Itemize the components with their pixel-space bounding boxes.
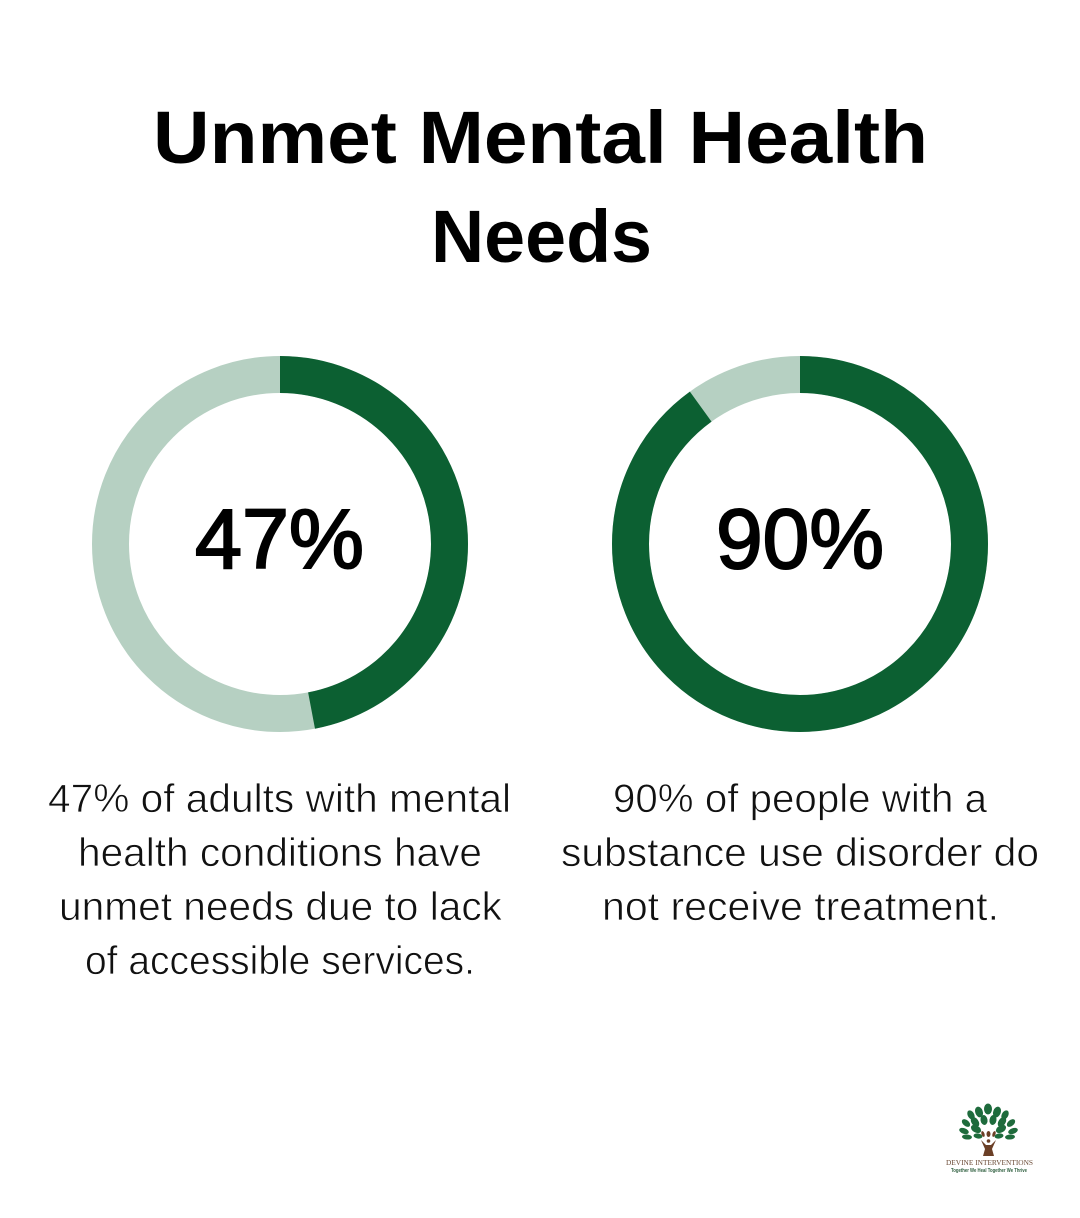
description: 90% of people: substance use disorder do xyxy=(561,831,1039,875)
description: 47% of adults: 47% of adults with mental xyxy=(48,777,511,821)
logo name: DEVINE INTERVENTIONS xyxy=(946,1159,1033,1167)
donut chart: 90% xyxy=(630,374,970,714)
icon: figure trunk xyxy=(981,1131,996,1156)
logo: Devine Interventions xyxy=(946,1104,1033,1174)
description: 47% of adults: health conditions have xyxy=(78,831,482,875)
title: Unmet Mental Health xyxy=(153,96,928,179)
description: 90% of people xyxy=(561,777,1039,929)
description: 47% of adults: unmet needs due to lack xyxy=(59,885,503,929)
logo tagline: Together We Heal Together We Thrive xyxy=(951,1168,1027,1174)
description: 90% of people: not receive treatment. xyxy=(602,885,999,929)
description: 47% of adults: of accessible services. xyxy=(85,939,475,983)
title: Needs xyxy=(431,195,652,278)
donut chart: 47% xyxy=(110,374,450,714)
donut value: 90%: 90% xyxy=(716,492,884,586)
description: 90% of people: 90% of people with a xyxy=(613,777,988,821)
donut value: 47%: 47% xyxy=(195,492,364,586)
description: 47% of adults xyxy=(48,777,511,983)
icon: green tree canopy xyxy=(958,1104,1019,1140)
title xyxy=(153,96,928,278)
panel: 47% adults statistic xyxy=(48,374,511,983)
panel: 90% substance use statistic xyxy=(561,374,1039,929)
